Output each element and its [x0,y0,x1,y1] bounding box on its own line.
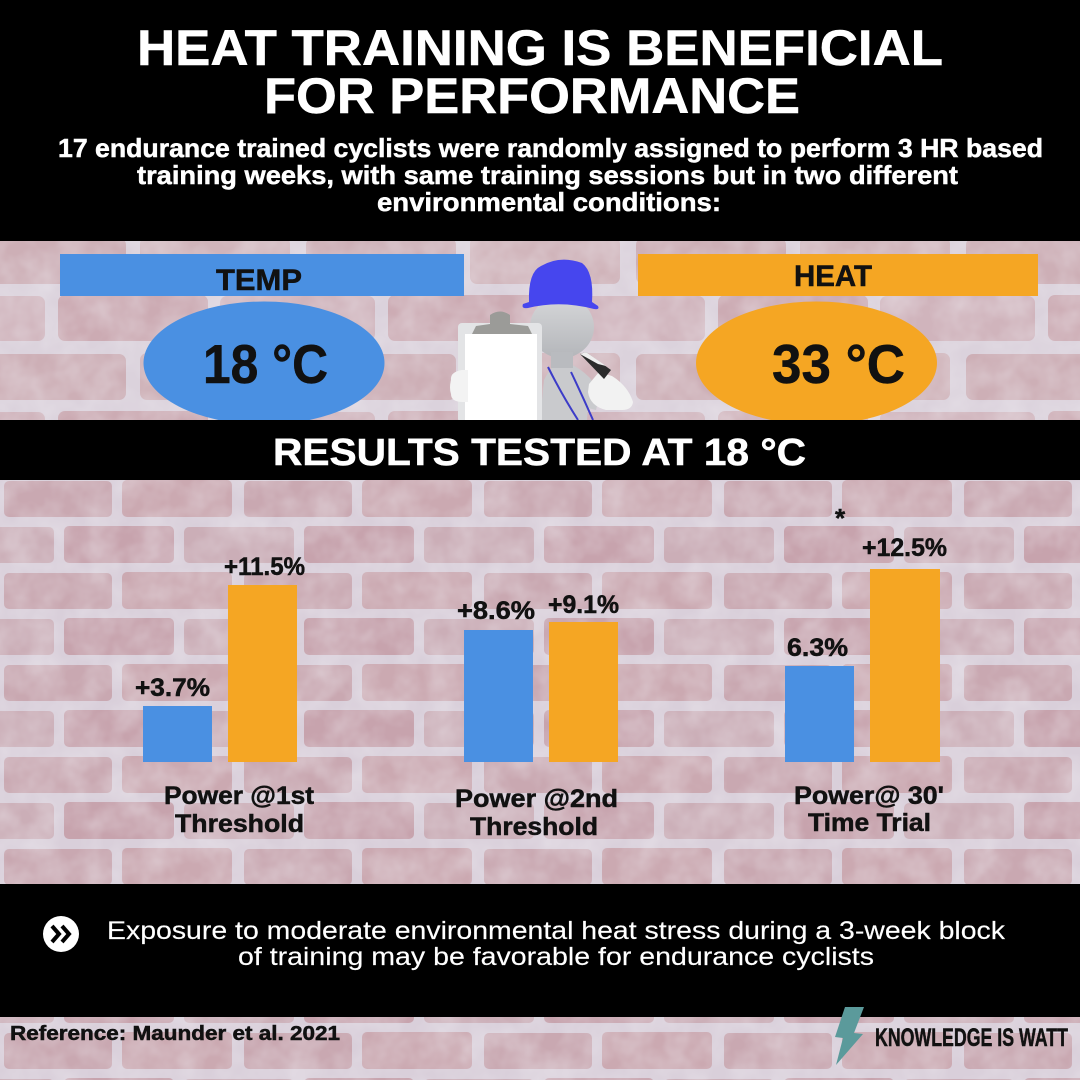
results heading band: RESULTS TESTED AT 18 °C [273,432,806,474]
group: power at first threshold: Power @1st [164,782,315,810]
group: power at first threshold [135,553,315,838]
title: FOR PERFORMANCE [264,68,800,124]
group: power at second threshold [455,591,619,841]
group: power at 30 minute time trial: * [835,503,846,533]
title [137,20,943,124]
header panel [0,0,1080,241]
panel: heat condition [638,254,1038,424]
group: power at first threshold: +11.5% [224,553,305,581]
conclusion text: of training may be favorable for endurance cyclists [238,943,874,971]
group: power at 30 minute time trial: 6.3% [787,634,848,662]
study description: 17 endurance trained cyclists were randomly assigned to perform 3 HR based [58,133,1043,163]
study description: training weeks, with same training sessions but in two different [137,160,958,190]
icon: coach figure with clipboard and whistle [450,260,633,424]
group: power at first threshold: +3.7% [135,674,210,702]
reference: Reference: Maunder et al. 2021 [10,1023,340,1045]
bar chart: results [135,503,947,841]
panel: heat condition: HEAT [794,260,872,293]
study description [58,133,1043,217]
group: power at second threshold: +9.1% [548,591,619,619]
panel: temperate condition: TEMP [216,264,302,297]
panel: temperate condition: 18 °C [203,333,328,395]
conclusion text [107,917,1006,971]
group: power at second threshold: +8.6% [457,597,535,625]
group: power at second threshold: Threshold [470,813,598,841]
conclusion panel [0,884,1080,1017]
group: power at second threshold: Power @2nd [455,785,618,813]
title: HEAT TRAINING IS BENEFICIAL [137,20,943,76]
results heading band [0,420,1080,480]
group: power at first threshold: Threshold [175,810,304,838]
group: power at 30 minute time trial: Power@ 30' [794,782,944,810]
group: power at 30 minute time trial [785,503,947,837]
group: power at 30 minute time trial: +12.5% [862,534,947,562]
icon: double chevron [43,916,79,952]
study description: environmental conditions: [377,187,721,217]
panel: temperate condition [60,254,464,424]
conclusion text: Exposure to moderate environmental heat stress during a 3-week block [107,917,1006,945]
group: power at 30 minute time trial: Time Trial [808,809,931,837]
panel: heat condition: 33 °C [772,333,905,395]
logo: knowledge is watt [835,1007,1068,1065]
